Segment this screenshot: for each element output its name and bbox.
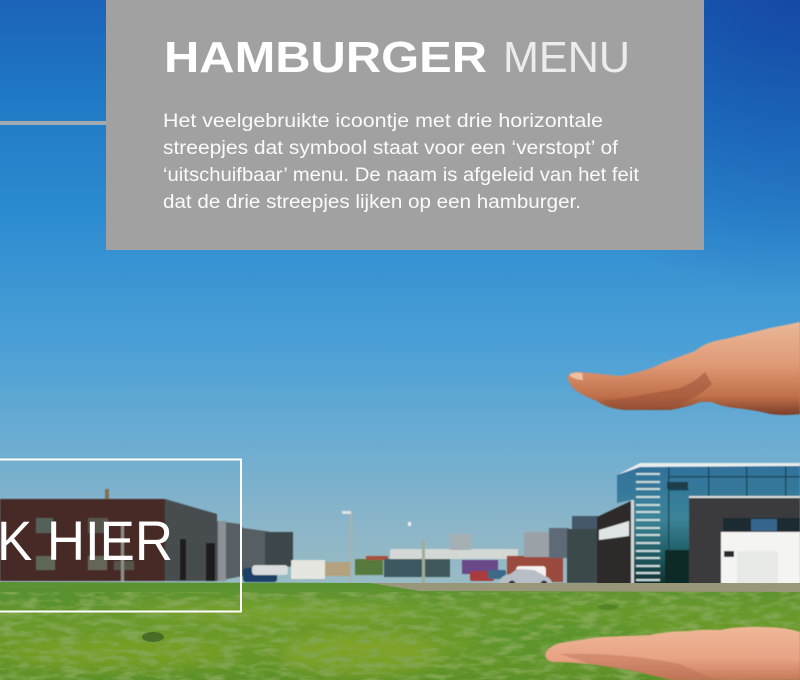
industrial buildings: left row [0, 489, 293, 581]
vehicles and distant buildings: centre [243, 511, 518, 587]
heading: hamburger menu: MENU [503, 33, 630, 82]
heading: hamburger menu: HAMBURGER [164, 33, 487, 82]
call to action: klik hier frame [0, 460, 241, 612]
heading: hamburger menu [164, 33, 630, 82]
industrial buildings: right complex [507, 463, 800, 589]
text block: definition [163, 111, 640, 213]
panel: hamburger menu explanation [106, 0, 704, 250]
text block: definition: streepjes dat symbool staat voor een ‘verstopt’ of [163, 138, 619, 159]
text block: definition: ‘uitschuifbaar’ menu. De naam is afgeleid van het feit [163, 165, 640, 186]
photo accent: top hand [567, 322, 800, 415]
text block: definition: dat de drie streepjes lijken op een hamburger. [163, 192, 581, 213]
parked car and van [499, 566, 552, 588]
ground: road strip and green grass [0, 582, 800, 680]
call to action: klik hier frame: K HIER [0, 509, 173, 572]
connector line [0, 121, 106, 125]
photo accent: bottom hand [545, 627, 800, 680]
text block: definition: Het veelgebruikte icoontje met drie horizontale [163, 111, 603, 132]
